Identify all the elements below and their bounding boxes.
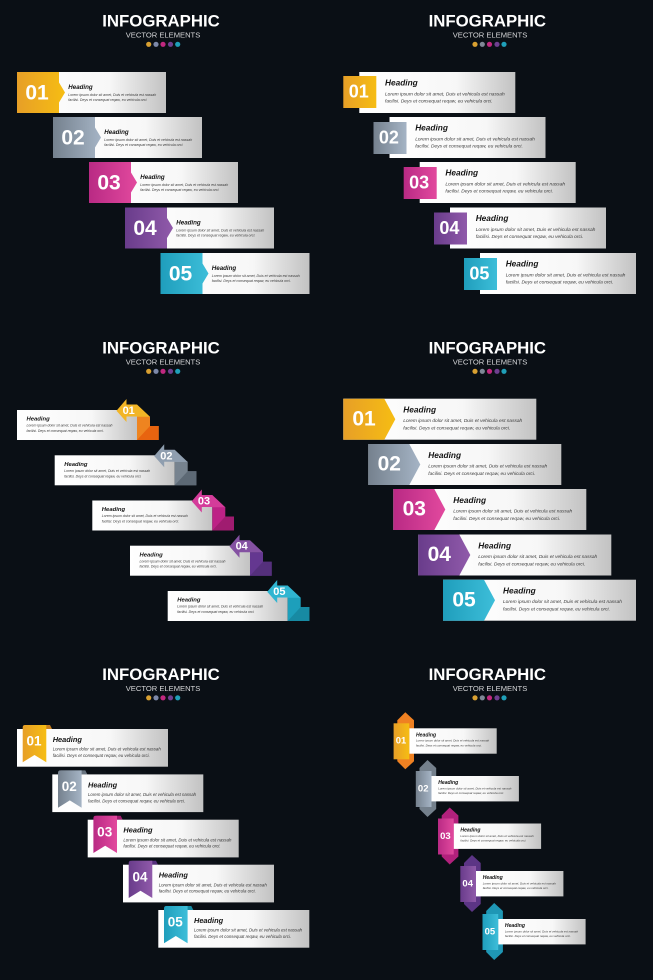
step 04: 04 (133, 217, 157, 240)
step 03: Lorem ipsum dolor sit amet, Duis et vehicula est nassah (445, 181, 565, 187)
panel: infographic 1, arrow tabs (17, 12, 310, 294)
step 03: facilisi. Deys et consequat reqaw, eu vehicula orci. (460, 838, 526, 842)
step 05: Heading (194, 916, 224, 925)
step 05 (464, 253, 636, 294)
step 01: facilisi. Deys et consequat reqaw, eu vehicula orci. (416, 743, 482, 747)
step 02: facilisi. Deys et consequat reqaw, eu vehicula orci. (88, 798, 185, 803)
step 04: Lorem ipsum dolor sit amet, Duis et vehicula est nassah (476, 227, 596, 233)
step 05: facilisi. Deys et consequat reqaw, eu vehicula orci. (505, 934, 571, 938)
step 02: 02 (62, 779, 77, 794)
step 02 (53, 117, 202, 158)
header 6: VECTOR ELEMENTS (453, 684, 527, 693)
header 2: VECTOR ELEMENTS (453, 30, 527, 39)
step 04: Lorem ipsum dolor sit amet, Duis et vehicula est nassah (176, 228, 264, 232)
step 03 (88, 816, 239, 857)
step 03: 03 (409, 173, 429, 193)
step 03: Heading (140, 174, 165, 181)
step 01 (343, 399, 536, 440)
step 05: Lorem ipsum dolor sit amet, Duis et vehicula est nassah (506, 272, 626, 278)
step 04: Heading (140, 552, 163, 558)
panel: infographic 6, vertical ribbons (394, 665, 586, 960)
step 05: Lorem ipsum dolor sit amet, Duis et vehicula est nassah (177, 605, 263, 609)
header 6 (429, 665, 546, 700)
step 03: Heading (445, 168, 478, 178)
step 05: Lorem ipsum dolor sit amet, Duis et vehicula est nassah (212, 274, 300, 278)
step 03: Heading (453, 495, 486, 505)
step 01: facilisi. Deys et consequat reqaw, eu vehicula orci. (385, 99, 493, 105)
step 02: facilisi. Deys et consequat reqaw, eu vehicula orci. (415, 144, 523, 150)
step 04: Heading (176, 220, 201, 226)
step 01: facilisi. Deys et consequat reqaw, eu vehicula orci. (68, 98, 147, 102)
step 01: facilisi. Deys et consequat reqaw, eu vehicula orci. (403, 426, 510, 432)
step 02: Lorem ipsum dolor sit amet, Duis et vehicula est nassah (88, 792, 197, 797)
step 05: 05 (169, 262, 192, 285)
step 02: Heading (88, 780, 118, 789)
step 02: 02 (379, 128, 399, 148)
step 02: Heading (438, 780, 459, 786)
step 04: Lorem ipsum dolor sit amet, Duis et vehicula est nassah (483, 881, 556, 885)
step 02 (416, 760, 519, 817)
step 05 (443, 580, 636, 621)
step 04: facilisi. Deys et consequat reqaw, eu vehicula orci. (476, 234, 583, 240)
step 01 (17, 725, 168, 767)
header 3 (102, 339, 220, 374)
step 02: 02 (418, 783, 428, 794)
step 03: Heading (460, 828, 481, 834)
step 05 (168, 580, 309, 621)
step 02 (368, 444, 561, 485)
step 01 (394, 712, 497, 769)
step 05 (482, 903, 586, 960)
header 3: VECTOR ELEMENTS (126, 357, 200, 366)
panel: infographic 2, square tabs (343, 12, 636, 294)
step 01: 01 (123, 405, 135, 417)
step 01: Lorem ipsum dolor sit amet, Duis et vehicula est nassah (403, 418, 523, 424)
step 03: Lorem ipsum dolor sit amet, Duis et vehicula est nassah (453, 508, 573, 514)
step 01: Heading (68, 84, 93, 91)
step 03: 03 (97, 171, 121, 194)
step 04 (125, 208, 274, 248)
step 04: facilisi. Deys et consequat reqaw, eu vehicula orci. (159, 889, 256, 894)
step 03: 03 (440, 831, 451, 842)
step 03: Heading (123, 826, 153, 835)
header 2 (429, 12, 546, 47)
step 05: facilisi. Deys et consequat reqaw, eu vehicula orci. (194, 934, 291, 939)
step 04: 04 (132, 869, 148, 884)
step 04: facilisi. Deys et consequat reqaw, eu vehicula orci. (478, 562, 585, 568)
step 02: Heading (415, 123, 448, 133)
step 03 (89, 162, 238, 203)
step 01: 01 (396, 736, 407, 747)
step 02: facilisi. Deys et consequat reqaw, eu vehicula orci. (428, 471, 535, 477)
step 02 (55, 444, 196, 485)
header 3: INFOGRAPHIC (102, 339, 220, 358)
step 01 (343, 72, 515, 113)
header 6: INFOGRAPHIC (429, 665, 546, 684)
header 2: INFOGRAPHIC (429, 12, 546, 31)
step 02: Lorem ipsum dolor sit amet, Duis et vehicula est nassah (428, 463, 548, 469)
step 02: Lorem ipsum dolor sit amet, Duis et vehicula est nassah (104, 138, 192, 142)
step 02: Lorem ipsum dolor sit amet, Duis et vehicula est nassah (64, 469, 150, 473)
step 02: Heading (64, 462, 88, 468)
header 1: INFOGRAPHIC (102, 12, 220, 31)
step 02: 02 (160, 450, 173, 462)
step 03 (92, 490, 234, 530)
step 03: facilisi. Deys et consequat reqaw, eu vehicula orci. (445, 189, 553, 195)
step 05: 05 (273, 586, 286, 598)
step 03 (404, 162, 576, 203)
header 4: VECTOR ELEMENTS (453, 357, 527, 366)
panel: infographic 3, folded arrows (17, 339, 309, 621)
header 4: INFOGRAPHIC (429, 339, 546, 358)
step 03: Lorem ipsum dolor sit amet, Duis et vehicula est nassah (140, 183, 228, 187)
step 02: facilisi. Deys et consequat reqaw, eu vehicula orci. (64, 474, 142, 478)
step 04: Lorem ipsum dolor sit amet, Duis et vehicula est nassah (478, 554, 598, 560)
step 01: Heading (403, 405, 436, 415)
step 02: 02 (378, 453, 401, 476)
step 03: facilisi. Deys et consequat reqaw, eu vehicula orci. (123, 844, 221, 849)
step 04 (418, 534, 611, 576)
step 01: Heading (385, 78, 418, 88)
step 03: facilisi. Deys et consequat reqaw, eu vehicula orci. (140, 188, 219, 192)
step 01 (17, 72, 166, 113)
step 01: facilisi. Deys et consequat reqaw, eu vehicula orci. (26, 429, 104, 433)
step 05 (158, 906, 309, 948)
step 05: Lorem ipsum dolor sit amet, Duis et vehicula est nassah (194, 928, 303, 933)
step 05: facilisi. Deys et consequat reqaw, eu vehicula orci. (177, 610, 255, 614)
step 01: Heading (26, 417, 50, 423)
panel: infographic 5, bookmarks (17, 665, 309, 948)
step 03: Lorem ipsum dolor sit amet, Duis et vehicula est nassah (460, 834, 534, 838)
step 01: Lorem ipsum dolor sit amet, Duis et vehicula est nassah (416, 739, 490, 743)
step 03: 03 (198, 496, 210, 508)
step 05: Lorem ipsum dolor sit amet, Duis et vehicula est nassah (503, 599, 622, 605)
header 5: INFOGRAPHIC (102, 665, 220, 684)
step 02: Lorem ipsum dolor sit amet, Duis et vehicula est nassah (415, 136, 535, 142)
step 05: facilisi. Deys et consequat reqaw, eu vehicula orci. (212, 279, 291, 283)
step 04: 04 (428, 543, 451, 566)
header 5 (102, 665, 220, 700)
step 01: Heading (416, 732, 437, 738)
step 01: 01 (25, 81, 49, 104)
step 03 (393, 489, 586, 530)
step 05: Heading (212, 265, 236, 272)
step 01 (17, 399, 159, 440)
step 04: facilisi. Deys et consequat reqaw, eu vehicula orci. (176, 234, 255, 238)
step 01: Lorem ipsum dolor sit amet, Duis et vehicula est nassah (53, 747, 161, 752)
step 03: Lorem ipsum dolor sit amet, Duis et vehicula est nassah (123, 837, 232, 842)
header 1 (102, 12, 220, 47)
step 03: 03 (403, 498, 426, 521)
step 02: 02 (61, 126, 85, 149)
step 01: Heading (53, 735, 82, 744)
step 04: 04 (462, 878, 474, 889)
step 01: 01 (349, 82, 369, 102)
step 01: 01 (26, 734, 42, 749)
step 02 (374, 117, 546, 158)
step 01: facilisi. Deys et consequat reqaw, eu vehicula orci. (53, 753, 150, 758)
step 01: Lorem ipsum dolor sit amet, Duis et vehicula est nassah (26, 424, 113, 428)
step 05: 05 (452, 588, 476, 611)
step 02: Lorem ipsum dolor sit amet, Duis et vehicula est nassah (438, 786, 512, 790)
step 04: facilisi. Deys et consequat reqaw, eu vehicula orci. (140, 565, 217, 569)
step 04: Heading (476, 213, 508, 223)
step 04: 04 (439, 218, 459, 238)
step 04 (460, 855, 563, 912)
panel: infographic 4, large chevrons (343, 339, 636, 621)
step 04: Heading (483, 875, 504, 881)
step 05: Heading (505, 923, 526, 929)
step 01: Lorem ipsum dolor sit amet, Duis et vehicula est nassah (385, 91, 505, 97)
step 05: facilisi. Deys et consequat reqaw, eu vehicula orci. (506, 280, 613, 286)
step 04: Lorem ipsum dolor sit amet, Duis et vehicula est nassah (159, 882, 267, 887)
step 03 (438, 808, 541, 864)
step 04: Heading (478, 540, 511, 550)
step 05: 05 (469, 264, 489, 284)
step 05: 05 (485, 926, 496, 937)
step 03: facilisi. Deys et consequat reqaw, eu vehicula orci. (102, 520, 179, 524)
step 05 (160, 253, 310, 294)
step 01: 01 (352, 407, 376, 430)
step 05: facilisi. Deys et consequat reqaw, eu vehicula orci. (503, 607, 610, 613)
step 02: Heading (104, 129, 129, 136)
step 01: Lorem ipsum dolor sit amet, Duis et vehicula est nassah (68, 93, 156, 97)
step 04: Heading (159, 871, 188, 880)
step 04: Lorem ipsum dolor sit amet, Duis et vehicula est nassah (140, 559, 226, 563)
step 03: 03 (97, 824, 113, 839)
header 1: VECTOR ELEMENTS (126, 30, 200, 39)
step 03: facilisi. Deys et consequat reqaw, eu vehicula orci. (453, 516, 560, 522)
step 04: 04 (236, 541, 249, 553)
step 02 (52, 770, 203, 812)
step 04 (434, 208, 606, 248)
step 05: 05 (168, 915, 183, 930)
step 03: Heading (102, 507, 125, 513)
step 05: Lorem ipsum dolor sit amet, Duis et vehicula est nassah (505, 929, 578, 933)
step 05: Heading (503, 586, 536, 596)
step 02: facilisi. Deys et consequat reqaw, eu vehicula orci. (438, 791, 504, 795)
header 5: VECTOR ELEMENTS (126, 684, 200, 693)
step 04 (130, 535, 272, 576)
step 04: facilisi. Deys et consequat reqaw, eu vehicula orci. (483, 886, 549, 890)
step 02: facilisi. Deys et consequat reqaw, eu vehicula orci. (104, 143, 183, 147)
step 02: Heading (428, 450, 461, 460)
step 04 (123, 861, 274, 902)
step 05: Heading (177, 598, 201, 604)
step 05: Heading (506, 259, 538, 269)
step 03: Lorem ipsum dolor sit amet, Duis et vehicula est nassah (102, 514, 188, 518)
header 4 (429, 339, 546, 374)
